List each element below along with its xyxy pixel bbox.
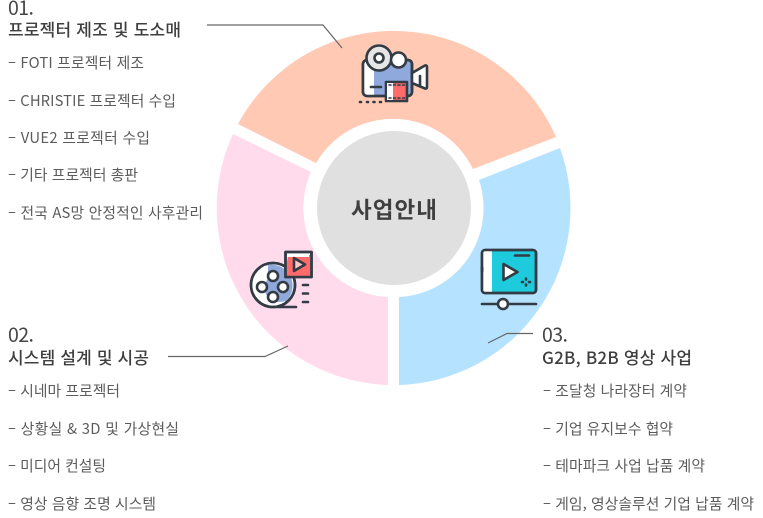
list 02: – 시네마 프로젝터 [8, 380, 120, 401]
donut chart [217, 31, 571, 385]
list 03: – 게임, 영상솔루션 기업 납품 계약 [543, 493, 754, 514]
list 01: – 전국 AS망 안정적인 사후관리 [8, 202, 203, 223]
leader line 02 [168, 346, 288, 356]
list 03: – 조달청 나라장터 계약 [543, 380, 687, 401]
icon: movie camera [360, 46, 427, 102]
list 01 [8, 52, 203, 223]
icon: film reel with play box [251, 252, 312, 307]
list 01: – VUE2 프로젝터 수입 [8, 127, 150, 148]
list 02: – 상황실 & 3D 및 가상현실 [8, 418, 179, 439]
list 01: – FOTI 프로젝터 제조 [8, 52, 144, 73]
list 03: – 기업 유지보수 협약 [543, 418, 673, 439]
segment: blue (03) [399, 148, 571, 385]
number 02: 02. [8, 319, 34, 348]
list 01: – CHRISTIE 프로젝터 수입 [8, 90, 176, 111]
icon: video screen player [482, 250, 536, 309]
list 02: – 영상 음향 조명 시스템 [8, 493, 156, 514]
leader line 03 [488, 334, 533, 343]
heading 01: 프로젝터 제조 및 도소매 [8, 16, 181, 41]
panel: 03 G2B B2B video business [542, 319, 754, 514]
list 02: – 미디어 컨설팅 [8, 455, 106, 476]
heading 02: 시스템 설계 및 시공 [8, 344, 149, 369]
list 02 [8, 380, 179, 514]
number 03: 03. [542, 319, 568, 348]
panel: 02 system design [8, 319, 179, 514]
list 01: – 기타 프로젝터 총판 [8, 164, 138, 185]
leader line 01 [207, 25, 342, 48]
center circle [317, 131, 471, 285]
list 03: – 테마파크 사업 납품 계약 [543, 455, 705, 476]
segment: peach (01) [238, 31, 556, 169]
list 03 [543, 380, 754, 514]
segment: pink (02) [217, 134, 388, 385]
center label: 사업안내 [351, 193, 437, 225]
panel: 01 projector manufacturing [8, 0, 203, 223]
heading 03: G2B, B2B 영상 사업 [542, 344, 692, 369]
